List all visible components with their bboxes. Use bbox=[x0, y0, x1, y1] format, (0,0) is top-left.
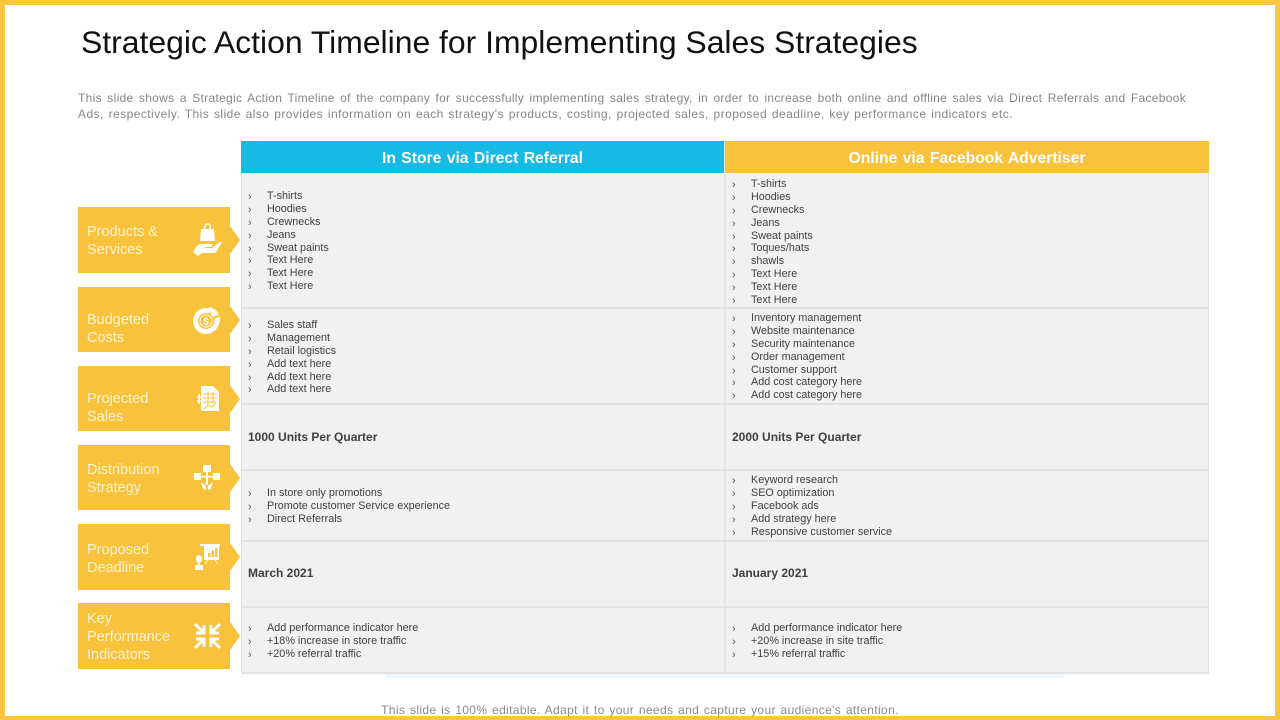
products list: in store: › bbox=[248, 191, 252, 203]
strategy list: online bbox=[732, 474, 892, 539]
costs list: in store: › bbox=[248, 346, 252, 358]
products list: online: Jeans bbox=[751, 217, 780, 229]
costs list: online: Security maintenance bbox=[751, 338, 855, 350]
label: proposed deadline bbox=[78, 524, 230, 590]
costs list: online: Website maintenance bbox=[751, 325, 855, 337]
costs list: online: › bbox=[732, 377, 736, 389]
costs list: in store: Add text here bbox=[267, 383, 331, 395]
costs list: in store bbox=[248, 319, 336, 396]
strategy list: online: › bbox=[732, 488, 736, 500]
strategy list: online: Keyword research bbox=[751, 474, 838, 486]
icon: presenter with chart bbox=[195, 544, 220, 570]
products list: online: › bbox=[732, 218, 736, 230]
products list: in store: Text Here bbox=[267, 267, 313, 279]
kpi list: online: +20% increase in site traffic bbox=[751, 635, 883, 647]
strategy list: online: SEO optimization bbox=[751, 487, 834, 499]
label: budgeted costs: Budgeted bbox=[87, 312, 149, 328]
deadline: in store: March 2021 bbox=[248, 566, 313, 580]
strategy list: in store: › bbox=[248, 501, 252, 513]
strategy list: in store: Promote customer Service experience bbox=[267, 500, 450, 512]
costs list: in store: Add text here bbox=[267, 358, 331, 370]
label: key performance indicators: Performance bbox=[87, 629, 170, 645]
strategy list: online: Facebook ads bbox=[751, 500, 819, 512]
title: Strategic Action Timeline for Implementing Sales Strategies bbox=[81, 24, 918, 60]
costs list: online: › bbox=[732, 339, 736, 351]
products list: in store: Text Here bbox=[267, 280, 313, 292]
products list: online: › bbox=[732, 192, 736, 204]
products list: in store: T-shirts bbox=[267, 190, 302, 202]
intro text bbox=[78, 91, 1186, 121]
products list: online: Sweat paints bbox=[751, 230, 813, 242]
costs list: in store: Management bbox=[267, 332, 330, 344]
products list: online: shawls bbox=[751, 255, 784, 267]
label: key performance indicators: Indicators bbox=[87, 647, 150, 663]
costs list: online: › bbox=[732, 313, 736, 325]
costs list: online: › bbox=[732, 352, 736, 364]
footer note: This slide is 100% editable. Adapt it to your needs and capture your audience's attention. bbox=[381, 703, 899, 717]
kpi list: online: › bbox=[732, 623, 736, 635]
label: projected sales: Projected bbox=[87, 391, 148, 407]
kpi list: in store: +20% referral traffic bbox=[267, 648, 361, 660]
column header: in store bbox=[241, 141, 724, 173]
products list: online: Hoodies bbox=[751, 191, 791, 203]
strategy list: online: › bbox=[732, 514, 736, 526]
kpi list: in store: Add performance indicator here bbox=[267, 622, 418, 634]
icon: distribution network bbox=[194, 465, 220, 490]
products list: in store: › bbox=[248, 204, 252, 216]
strategy list: online: › bbox=[732, 475, 736, 487]
strategy list: online: Responsive customer service bbox=[751, 526, 892, 538]
strategy list: in store: Direct Referrals bbox=[267, 513, 342, 525]
label: budgeted costs: Costs bbox=[87, 330, 124, 346]
label: products and services: Products & bbox=[87, 224, 158, 240]
products list: online: Text Here bbox=[751, 281, 797, 293]
label: proposed deadline: Deadline bbox=[87, 560, 144, 576]
icon: coin pie chart bbox=[193, 307, 220, 334]
costs list: online: › bbox=[732, 365, 736, 377]
kpi list: in store bbox=[248, 622, 418, 661]
products list: online: T-shirts bbox=[751, 178, 786, 190]
products list: in store: Jeans bbox=[267, 229, 296, 241]
costs list: in store: › bbox=[248, 333, 252, 345]
label: products and services bbox=[78, 207, 230, 273]
strategy list: in store: › bbox=[248, 514, 252, 526]
products list: in store: › bbox=[248, 281, 252, 293]
kpi list: in store: › bbox=[248, 649, 252, 661]
kpi list: online: +15% referral traffic bbox=[751, 648, 845, 660]
kpi list: in store: › bbox=[248, 623, 252, 635]
strategy list: in store: In store only promotions bbox=[267, 487, 382, 499]
products list: online: Crewnecks bbox=[751, 204, 804, 216]
intro text: This slide shows a Strategic Action Timeline of the company for successfully implementing sales strategy, in order to increase both online and offline sales via Direct Referrals and Facebook bbox=[78, 91, 1186, 105]
label: distribution strategy: Distribution bbox=[87, 462, 160, 478]
label: distribution strategy bbox=[78, 445, 230, 510]
products list: online: › bbox=[732, 243, 736, 255]
products list: in store: › bbox=[248, 243, 252, 255]
products list: online: Text Here bbox=[751, 294, 797, 306]
label: distribution strategy: Strategy bbox=[87, 480, 141, 496]
label: products and services: Services bbox=[87, 242, 143, 258]
products list: online: Toques/hats bbox=[751, 242, 809, 254]
costs list: in store: Add text here bbox=[267, 371, 331, 383]
costs list: online: Customer support bbox=[751, 364, 837, 376]
kpi list: in store: › bbox=[248, 636, 252, 648]
products list: online: › bbox=[732, 179, 736, 191]
strategy list: in store: › bbox=[248, 488, 252, 500]
kpi list: online: Add performance indicator here bbox=[751, 622, 902, 634]
products list: in store: Crewnecks bbox=[267, 216, 320, 228]
label: key performance indicators bbox=[78, 603, 230, 669]
kpi list: online: › bbox=[732, 649, 736, 661]
products list: online: › bbox=[732, 295, 736, 307]
costs list: online bbox=[732, 312, 862, 402]
label: key performance indicators: Key bbox=[87, 611, 112, 627]
strategy list: online: Add strategy here bbox=[751, 513, 836, 525]
label: projected sales bbox=[78, 366, 230, 431]
costs list: online: Add cost category here bbox=[751, 376, 862, 388]
costs list: online: › bbox=[732, 390, 736, 402]
kpi list: online bbox=[732, 622, 902, 661]
kpi list: online: › bbox=[732, 636, 736, 648]
products list: online: › bbox=[732, 282, 736, 294]
costs list: in store: › bbox=[248, 372, 252, 384]
kpi list: in store: +18% increase in store traffic bbox=[267, 635, 406, 647]
icon: hand holding bag bbox=[193, 223, 222, 256]
products list: in store: Text Here bbox=[267, 254, 313, 266]
strategy list: online: › bbox=[732, 501, 736, 513]
costs list: in store: Retail logistics bbox=[267, 345, 336, 357]
icon: sales report bbox=[197, 386, 219, 411]
icon: coin pie chart: $ bbox=[203, 317, 209, 328]
products list: in store: › bbox=[248, 230, 252, 242]
products list: in store: › bbox=[248, 255, 252, 267]
products list: in store bbox=[248, 190, 329, 293]
projected sales: online: 2000 Units Per Quarter bbox=[732, 430, 861, 444]
strategy list: online: › bbox=[732, 527, 736, 539]
products list: online: › bbox=[732, 269, 736, 281]
costs list: in store: › bbox=[248, 384, 252, 396]
icon: four inward arrows bbox=[194, 623, 221, 649]
products list: online: › bbox=[732, 256, 736, 268]
products list: in store: Sweat paints bbox=[267, 242, 329, 254]
costs list: in store: Sales staff bbox=[267, 319, 317, 331]
column header: online: Online via Facebook Advertiser bbox=[849, 150, 1085, 167]
products list: online: › bbox=[732, 205, 736, 217]
costs list: online: Add cost category here bbox=[751, 389, 862, 401]
products list: online: › bbox=[732, 231, 736, 243]
products list: in store: › bbox=[248, 268, 252, 280]
products list: in store: › bbox=[248, 217, 252, 229]
strategy list: in store bbox=[248, 487, 450, 526]
products list: in store: Hoodies bbox=[267, 203, 307, 215]
column header: online bbox=[725, 141, 1209, 173]
costs list: online: Order management bbox=[751, 351, 845, 363]
products list: online: Text Here bbox=[751, 268, 797, 280]
intro text: Ads, respectively. This slide also provides information on each strategy's products, costing, projected sales, proposed deadline, key performance indicators etc. bbox=[78, 107, 1013, 121]
products list: online bbox=[732, 178, 813, 307]
costs list: online: Inventory management bbox=[751, 312, 861, 324]
costs list: online: › bbox=[732, 326, 736, 338]
costs list: in store: › bbox=[248, 359, 252, 371]
projected sales: in store: 1000 Units Per Quarter bbox=[248, 430, 377, 444]
label: projected sales: Sales bbox=[87, 409, 123, 425]
deadline: online: January 2021 bbox=[732, 566, 808, 580]
costs list: in store: › bbox=[248, 320, 252, 332]
label: budgeted costs bbox=[78, 287, 230, 352]
label: proposed deadline: Proposed bbox=[87, 542, 149, 558]
table background bbox=[241, 141, 1209, 674]
column header: in store: In Store via Direct Referral bbox=[382, 150, 583, 167]
